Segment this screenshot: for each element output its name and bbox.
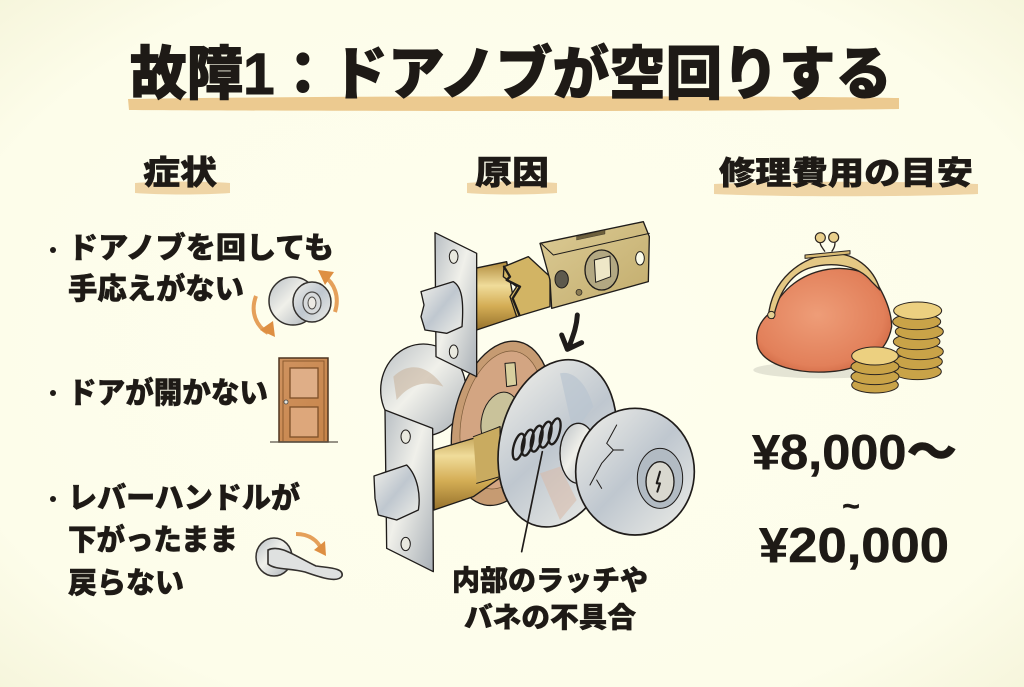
cause caption: バネの不具合 [464,602,636,633]
price range [752,426,957,573]
price range: ¥8,000〜 [752,426,957,480]
symptom 3 text: 下がったまま [68,523,238,557]
knob neck [560,423,597,483]
icon: door knob with rotation arrows [254,270,337,337]
symptom 3 text: レバーハンドルが [68,481,300,515]
symptom 1 text: 手応えがない [68,272,244,306]
upper latch chassis plate [540,222,649,308]
symptom 1 text: ドアノブを回しても [68,231,334,265]
lower faceplate [385,410,433,572]
upper latch tongue [421,282,463,333]
lower latch tongue [374,465,419,520]
title: 故障1：ドアノブが空回りする [130,42,892,107]
symptom 2 text: ドアが開かない [68,376,268,410]
front rose plate [481,347,634,540]
upper latch bolt cylinder [475,257,550,330]
icon: coin purse with coins [753,232,943,393]
icon: door [270,358,338,442]
back knob and rose [381,332,566,515]
symptom 3 text [50,481,300,600]
heading: cause [467,154,557,194]
heading: cause: 原因 [475,154,549,191]
lower latch cylinder [434,427,502,510]
upper faceplate [435,233,477,377]
icon: lever handle with arrow [256,534,342,579]
heading: symptoms: 症状 [143,154,217,191]
symptom 1 text [50,231,334,306]
cause caption: 内部のラッチや [452,565,648,596]
spring [510,417,563,461]
knob [576,408,694,535]
heading: symptoms [135,154,230,194]
tall coin stack [893,302,943,380]
price range: ¥20,000 [759,519,949,573]
price range: ~ [842,490,860,523]
short coin stack [851,347,899,393]
cause caption [452,565,648,633]
leader line [522,452,542,552]
arrow [562,315,582,349]
symptom 3 text: 戻らない [68,567,184,600]
heading: repair cost: 修理費用の目安 [719,155,973,191]
illustration: disassembled door knob lock [374,222,694,572]
